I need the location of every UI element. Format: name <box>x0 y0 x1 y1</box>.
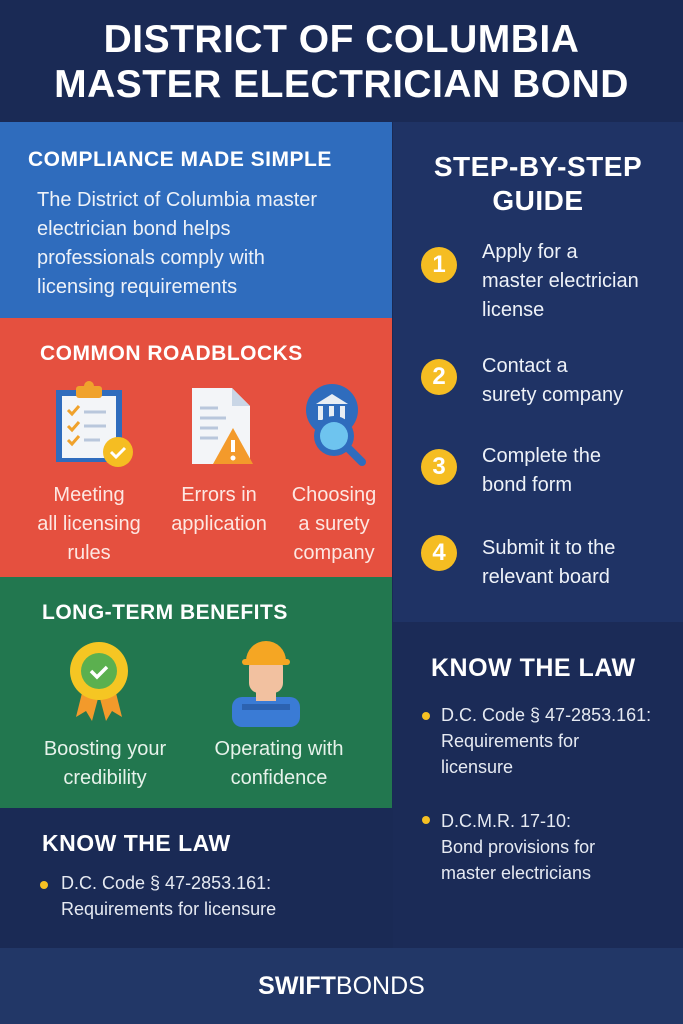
panel: benefits <box>0 577 392 808</box>
label: meeting rules: all licensing <box>37 513 141 535</box>
title: DISTRICT OF COLUMBIA <box>104 18 579 61</box>
icon: document warning <box>192 388 253 464</box>
step 1: Apply for a <box>482 241 578 263</box>
step 4: relevant board <box>482 566 610 588</box>
label: confidence <box>215 738 343 789</box>
panel: compliance <box>0 122 392 318</box>
icon: worker <box>232 641 300 727</box>
panel: step-by-step: 2 <box>432 363 446 390</box>
panel: roadblocks <box>0 318 392 577</box>
label: meeting rules <box>37 484 141 564</box>
heading: compliance: COMPLIANCE MADE SIMPLE <box>28 148 332 171</box>
label: errors <box>171 484 267 535</box>
footer: SWIFTBONDS <box>258 972 425 1000</box>
footer <box>0 948 683 1024</box>
label: confidence: Operating with <box>215 738 343 760</box>
label: meeting rules: rules <box>67 542 111 564</box>
heading: roadblocks: COMMON ROADBLOCKS <box>40 342 303 365</box>
panel: step-by-step: 1 <box>432 251 446 278</box>
label: choosing surety: Choosing <box>292 484 376 506</box>
law item 1: D.C. Code § 47-2853.161: <box>441 705 651 725</box>
step 3: bond form <box>482 474 572 496</box>
label: errors: Errors in <box>181 484 257 506</box>
text: compliance: The District of Columbia master electrician bond helps professionals comply with licensing requirements <box>37 189 317 298</box>
law item 2 <box>441 811 595 883</box>
icon: badge <box>70 642 128 721</box>
step 4 <box>482 537 615 588</box>
law item 2: master electricians <box>441 863 591 883</box>
heading: know the law right: KNOW THE LAW <box>431 654 636 682</box>
label: choosing surety <box>292 484 376 564</box>
text: law item <box>61 873 276 919</box>
panel: step-by-step: 3 <box>432 453 446 480</box>
law item 1: licensure <box>441 757 513 777</box>
label: choosing surety: company <box>293 542 375 564</box>
step 3: Complete the <box>482 445 601 467</box>
step 2 <box>482 355 624 406</box>
heading: steps: STEP-BY-STEP <box>434 151 642 182</box>
title <box>54 18 629 106</box>
panel: know the law left <box>0 808 392 948</box>
law item 2: Bond provisions for <box>441 837 595 857</box>
label: meeting rules: Meeting <box>53 484 125 506</box>
heading: steps: GUIDE <box>492 185 584 216</box>
step 1: master electrician <box>482 270 639 292</box>
step 3 <box>482 445 601 496</box>
label: credibility: credibility <box>63 767 147 789</box>
heading: benefits: LONG-TERM BENEFITS <box>42 601 288 624</box>
law item 2: D.C.M.R. 17-10: <box>441 811 571 831</box>
text: law item: Requirements for licensure <box>61 899 276 919</box>
law item 1 <box>441 705 651 777</box>
step 4: Submit it to the <box>482 537 615 559</box>
label: credibility <box>44 738 166 789</box>
label: choosing surety: a surety <box>298 513 370 535</box>
panel: step-by-step: 4 <box>432 539 446 566</box>
label: credibility: Boosting your <box>44 738 166 760</box>
label: confidence: confidence <box>231 767 327 789</box>
panel: step-by-step <box>393 122 683 622</box>
heading: know the law: KNOW THE LAW <box>42 830 231 856</box>
text: law item: D.C. Code § 47-2853.161: <box>61 873 271 893</box>
icon: clipboard <box>56 381 133 467</box>
panel: know the law right <box>393 622 683 948</box>
title: MASTER ELECTRICIAN BOND <box>54 63 629 106</box>
icon: bank magnifier <box>306 384 366 466</box>
step 2: surety company <box>482 384 623 406</box>
step 2: Contact a <box>482 355 568 377</box>
heading: steps <box>434 151 642 216</box>
step 1 <box>482 241 639 321</box>
law item 1: Requirements for <box>441 731 579 751</box>
step 1: license <box>482 299 544 321</box>
label: errors: application <box>171 513 267 535</box>
